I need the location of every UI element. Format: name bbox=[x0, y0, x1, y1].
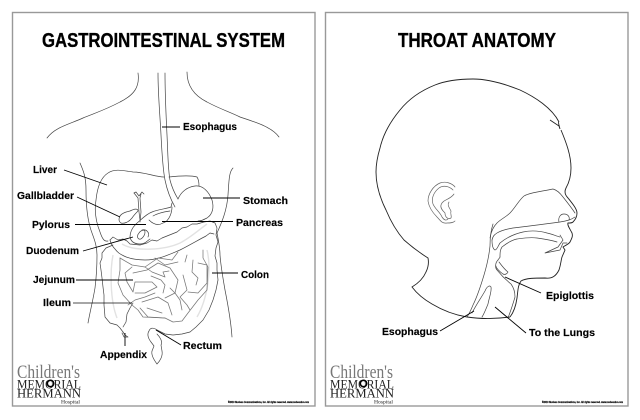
label: Appendix: Appendix bbox=[100, 349, 147, 361]
logo bbox=[17, 362, 82, 406]
label: To the Lungs bbox=[495, 307, 595, 339]
pharynx bbox=[467, 224, 515, 318]
nasal cavity bbox=[490, 189, 575, 250]
label: Esophagus: Esophagus bbox=[183, 121, 237, 133]
label: Pancreas bbox=[162, 217, 283, 229]
label: Appendix bbox=[100, 333, 147, 361]
esophagus tube bbox=[472, 286, 491, 317]
label: Ileum: Ileum bbox=[43, 297, 71, 309]
label: Ileum bbox=[43, 297, 132, 309]
label: Esophagus bbox=[162, 121, 237, 133]
label: Jejunum bbox=[33, 274, 133, 286]
duodenum and pylorus bbox=[138, 230, 149, 239]
logo: MEMORIAL bbox=[330, 378, 394, 392]
label: Colon bbox=[212, 269, 269, 281]
gallbladder bbox=[119, 209, 138, 223]
logo: Hospital bbox=[61, 400, 81, 406]
label: Esophagus bbox=[382, 311, 474, 338]
label: Rectum: Rectum bbox=[183, 340, 222, 352]
esophagus bbox=[158, 73, 178, 207]
logo: Hospital bbox=[374, 400, 394, 406]
label: Pylorus: Pylorus bbox=[32, 219, 70, 231]
label: Duodenum bbox=[26, 237, 133, 257]
copyright: ©2010 Nucleus Communications, Inc. All rights reserved. www.nucleusinc.com bbox=[228, 400, 309, 404]
title: GASTROINTESTINAL SYSTEM bbox=[42, 30, 285, 52]
label: Rectum bbox=[156, 330, 222, 352]
logo bbox=[330, 362, 395, 406]
mouth and tongue bbox=[498, 235, 567, 260]
colon haustra shading bbox=[111, 250, 209, 318]
label: Liver bbox=[33, 164, 107, 185]
label: Epiglottis: Epiglottis bbox=[546, 290, 594, 302]
label: Esophagus: Esophagus bbox=[382, 326, 438, 338]
head outline bbox=[376, 79, 577, 318]
logo: MEMORIAL bbox=[17, 378, 81, 392]
label: Stomach: Stomach bbox=[243, 195, 288, 207]
label: Liver: Liver bbox=[33, 164, 57, 176]
liver bbox=[95, 170, 199, 241]
panel: throat anatomy bbox=[326, 12, 628, 406]
logo: Children's bbox=[330, 362, 393, 383]
label: Pylorus bbox=[32, 219, 146, 231]
label: Jejunum: Jejunum bbox=[33, 274, 75, 286]
small intestine bbox=[118, 250, 208, 322]
logo: Children's bbox=[17, 362, 80, 383]
label: Pancreas: Pancreas bbox=[236, 217, 283, 229]
label: Duodenum: Duodenum bbox=[26, 245, 79, 257]
stomach bbox=[130, 186, 213, 244]
title: THROAT ANATOMY bbox=[398, 30, 557, 52]
label: Epiglottis bbox=[505, 277, 594, 302]
label: Colon: Colon bbox=[241, 269, 269, 281]
label: Gallbladder bbox=[17, 190, 120, 217]
rectum bbox=[148, 328, 162, 364]
label: Stomach bbox=[203, 195, 288, 207]
colon bbox=[100, 221, 218, 337]
label: To the Lungs: To the Lungs bbox=[529, 327, 595, 339]
ear bbox=[428, 182, 455, 223]
logo: HERMANN bbox=[330, 386, 395, 400]
pancreas bbox=[122, 224, 207, 249]
label: Gallbladder: Gallbladder bbox=[17, 190, 74, 202]
panel: gastrointestinal system bbox=[12, 12, 315, 406]
logo: HERMANN bbox=[17, 386, 82, 400]
torso outline bbox=[47, 72, 279, 337]
